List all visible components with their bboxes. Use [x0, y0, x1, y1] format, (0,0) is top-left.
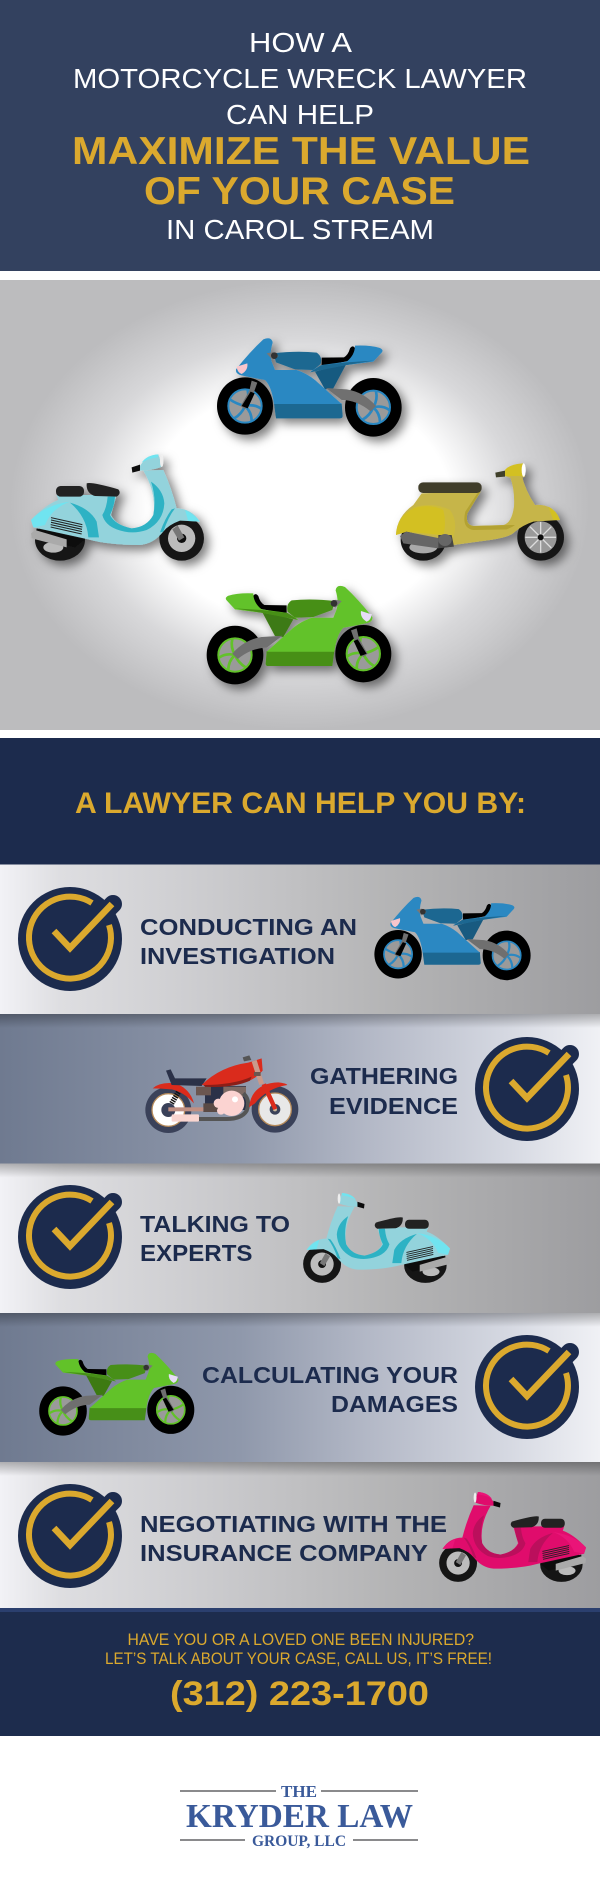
title: OF YOUR CASE [144, 170, 455, 213]
heading: A LAWYER CAN HELP YOU BY: [75, 787, 526, 820]
icon: check [18, 1484, 122, 1588]
icon: green sport bike [207, 586, 391, 684]
panel: gathering evidence [0, 1014, 600, 1164]
panel: calculating your damages [0, 1313, 600, 1462]
panel: talking to experts [0, 1164, 600, 1313]
icon: green sport bike [39, 1353, 194, 1436]
title: IN CAROL STREAM [166, 214, 434, 245]
icon: check [475, 1037, 579, 1141]
logo: The Kryder Law Group, LLC: THE [281, 1782, 317, 1801]
title: CAN HELP [226, 99, 374, 130]
icon: check [18, 887, 122, 991]
panel: motorcycles hero [0, 280, 600, 730]
call to action text: HAVE YOU OR A LOVED ONE BEEN INJURED? [128, 1631, 474, 1649]
text: INVESTIGATION [140, 943, 335, 969]
text: EVIDENCE [329, 1093, 458, 1119]
icon: check [475, 1335, 579, 1439]
call to action text: LET’S TALK ABOUT YOUR CASE, CALL US, IT’S FREE! [105, 1650, 492, 1668]
icon: red cafe motorcycle [145, 1055, 298, 1133]
text [140, 1511, 447, 1566]
text: CALCULATING YOUR [202, 1362, 458, 1388]
icon: blue sport bike [374, 897, 531, 980]
logo: The Kryder Law Group, LLC [180, 1782, 418, 1850]
icon: check [18, 1185, 122, 1289]
title: MOTORCYCLE WRECK LAWYER [73, 63, 527, 94]
panel: subheading [0, 738, 600, 865]
title: HOW A [249, 27, 352, 58]
phone number: (312) 223-1700 [170, 1675, 429, 1713]
icon: teal scooter [31, 454, 204, 561]
panel: conducting an investigation [0, 864, 600, 1014]
panel: negotiating with the insurance company [0, 1462, 600, 1608]
icon: yellow scooter [396, 463, 564, 561]
icon: blue sport bike [217, 338, 402, 437]
title [72, 27, 530, 245]
text [202, 1362, 458, 1417]
text: INSURANCE COMPANY [140, 1540, 428, 1566]
header panel [0, 0, 600, 271]
text [140, 914, 357, 969]
text: GATHERING [310, 1063, 458, 1089]
text: CONDUCTING AN [140, 914, 357, 940]
logo: The Kryder Law Group, LLC: GROUP, LLC [252, 1833, 346, 1850]
title: MAXIMIZE THE VALUE [72, 130, 530, 173]
text [310, 1063, 458, 1119]
logo: The Kryder Law Group, LLC: KRYDER LAW [186, 1798, 413, 1835]
text [140, 1211, 290, 1266]
icon: pink scooter [439, 1492, 586, 1582]
text: EXPERTS [140, 1240, 252, 1266]
text: TALKING TO [140, 1211, 290, 1237]
text: DAMAGES [331, 1391, 458, 1417]
call to action text [105, 1631, 492, 1668]
icon: teal scooter [303, 1193, 450, 1283]
text: NEGOTIATING WITH THE [140, 1511, 447, 1537]
panel: call to action [0, 1608, 600, 1736]
